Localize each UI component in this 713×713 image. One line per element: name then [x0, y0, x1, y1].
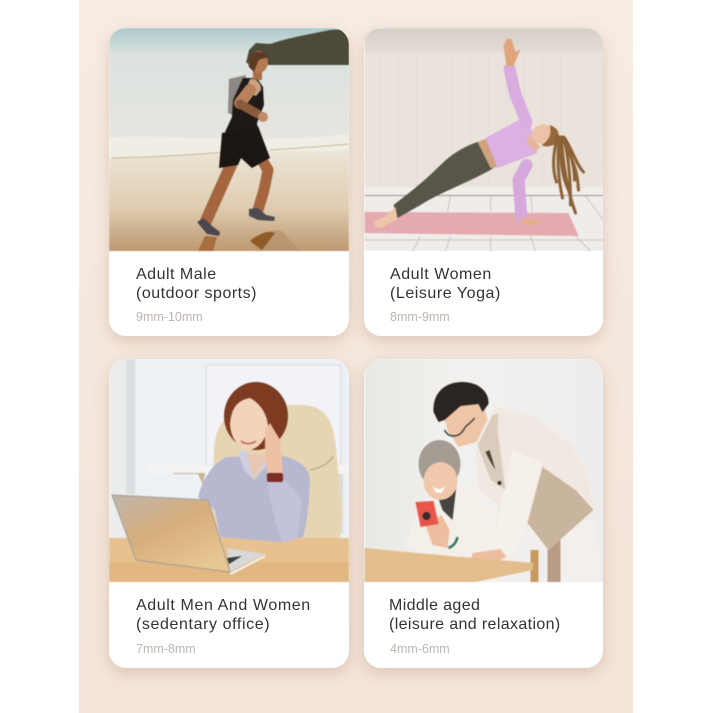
- card text: adult male: (outdoor sports): [136, 285, 257, 302]
- photo: older couple looking at phone: [364, 359, 603, 583]
- laptop: [112, 495, 265, 575]
- figure: [374, 39, 584, 228]
- panel: adult men and women sedentary office: [109, 359, 349, 668]
- panel: adult women leisure yoga: [364, 28, 603, 336]
- card text: adult male: [136, 266, 257, 302]
- thickness range: 7mm-8mm: [136, 642, 196, 656]
- card text: adult men and women: Adult Men And Women: [136, 597, 311, 614]
- card text: adult men and women: [136, 597, 311, 633]
- card text: middle aged: Middle aged: [389, 597, 480, 614]
- background panel: [79, 0, 633, 713]
- card text: middle aged: (leisure and relaxation): [389, 616, 561, 633]
- panel: middle aged leisure and relaxation: [364, 359, 603, 668]
- woman: [406, 440, 496, 557]
- card text: adult women: Adult Women: [390, 266, 492, 283]
- thickness range: 9mm-10mm: [136, 310, 203, 324]
- card text: adult male: Adult Male: [136, 266, 217, 283]
- card text: adult women: [390, 266, 501, 302]
- thickness range: 4mm-6mm: [390, 642, 450, 656]
- panel: adult male outdoor sports: [109, 28, 349, 336]
- thickness range: 8mm-9mm: [390, 310, 450, 324]
- card text: adult men and women: (sedentary office): [136, 616, 270, 633]
- photo: man running on beach: [109, 28, 349, 252]
- man: [433, 382, 594, 564]
- figure: [197, 51, 275, 236]
- photo: woman in side plank on pink mat: [364, 28, 603, 252]
- card text: middle aged: [389, 597, 561, 633]
- card text: adult women: (Leisure Yoga): [390, 285, 501, 302]
- table: [364, 548, 534, 582]
- figure: [198, 382, 310, 543]
- photo: woman on phone at laptop: [109, 359, 349, 583]
